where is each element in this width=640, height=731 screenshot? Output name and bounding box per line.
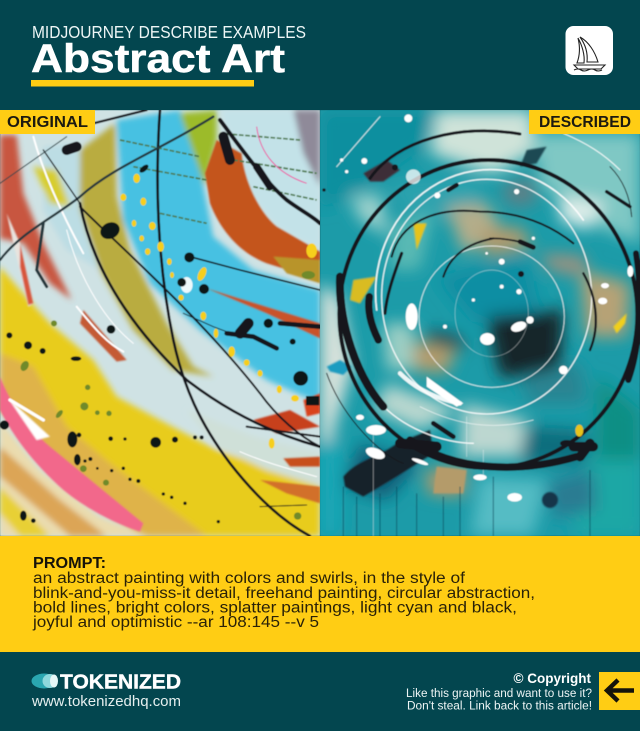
- prompt text block: [32, 555, 535, 631]
- white rings: [337, 117, 620, 536]
- copyright notice: © Copyright: [514, 671, 591, 686]
- prompt text block: an abstract painting with colors and swirls, in the style of: [33, 570, 466, 587]
- panel: described painting: [320, 110, 640, 536]
- prompt text block: PROMPT:: [33, 555, 106, 572]
- yellow prompt band background: [0, 536, 640, 652]
- website url: www.tokenizedhq.com: [31, 693, 181, 710]
- copyright notice: Don't steal. Link back to this article!: [407, 698, 592, 712]
- label: DESCRIBED: [529, 110, 640, 134]
- yellow drops: [120, 174, 317, 449]
- dashed green strokes: [120, 133, 317, 223]
- label: DESCRIBED: DESCRIBED: [539, 114, 631, 131]
- header band: [0, 0, 640, 110]
- prompt text block: joyful and optimistic --ar 108:145 --v 5: [32, 614, 319, 631]
- copyright notice: [406, 671, 592, 712]
- label: ORIGINAL: ORIGINAL: [7, 114, 88, 131]
- arrow button: [599, 672, 640, 710]
- copyright notice: Like this graphic and want to use it?: [406, 686, 592, 700]
- white splashes: [340, 114, 633, 502]
- olive drops: [19, 271, 315, 520]
- dark splatter dots: [322, 164, 573, 447]
- icon: Midjourney sailboat: [566, 26, 613, 75]
- white strokes: [10, 137, 317, 477]
- drips: [343, 470, 590, 536]
- label: ORIGINAL: [0, 110, 95, 134]
- black drops: [0, 163, 319, 523]
- panel: original painting: [0, 110, 320, 536]
- footer band: [0, 652, 640, 731]
- prompt text block: blink-and-you-miss-it detail, freehand painting, circular abstraction,: [33, 585, 535, 602]
- pink lines: [257, 127, 307, 183]
- title: Abstract Art: [31, 37, 285, 81]
- black rings: [327, 131, 640, 468]
- logo: Tokenized: TOKENIZED: [60, 672, 181, 694]
- title underline: [31, 80, 254, 86]
- black lines: [0, 110, 320, 536]
- eyebrow heading: MIDJOURNEY DESCRIBE EXAMPLES: [32, 22, 306, 42]
- prompt text block: bold lines, bright colors, splatter paintings, light cyan and black,: [33, 600, 517, 616]
